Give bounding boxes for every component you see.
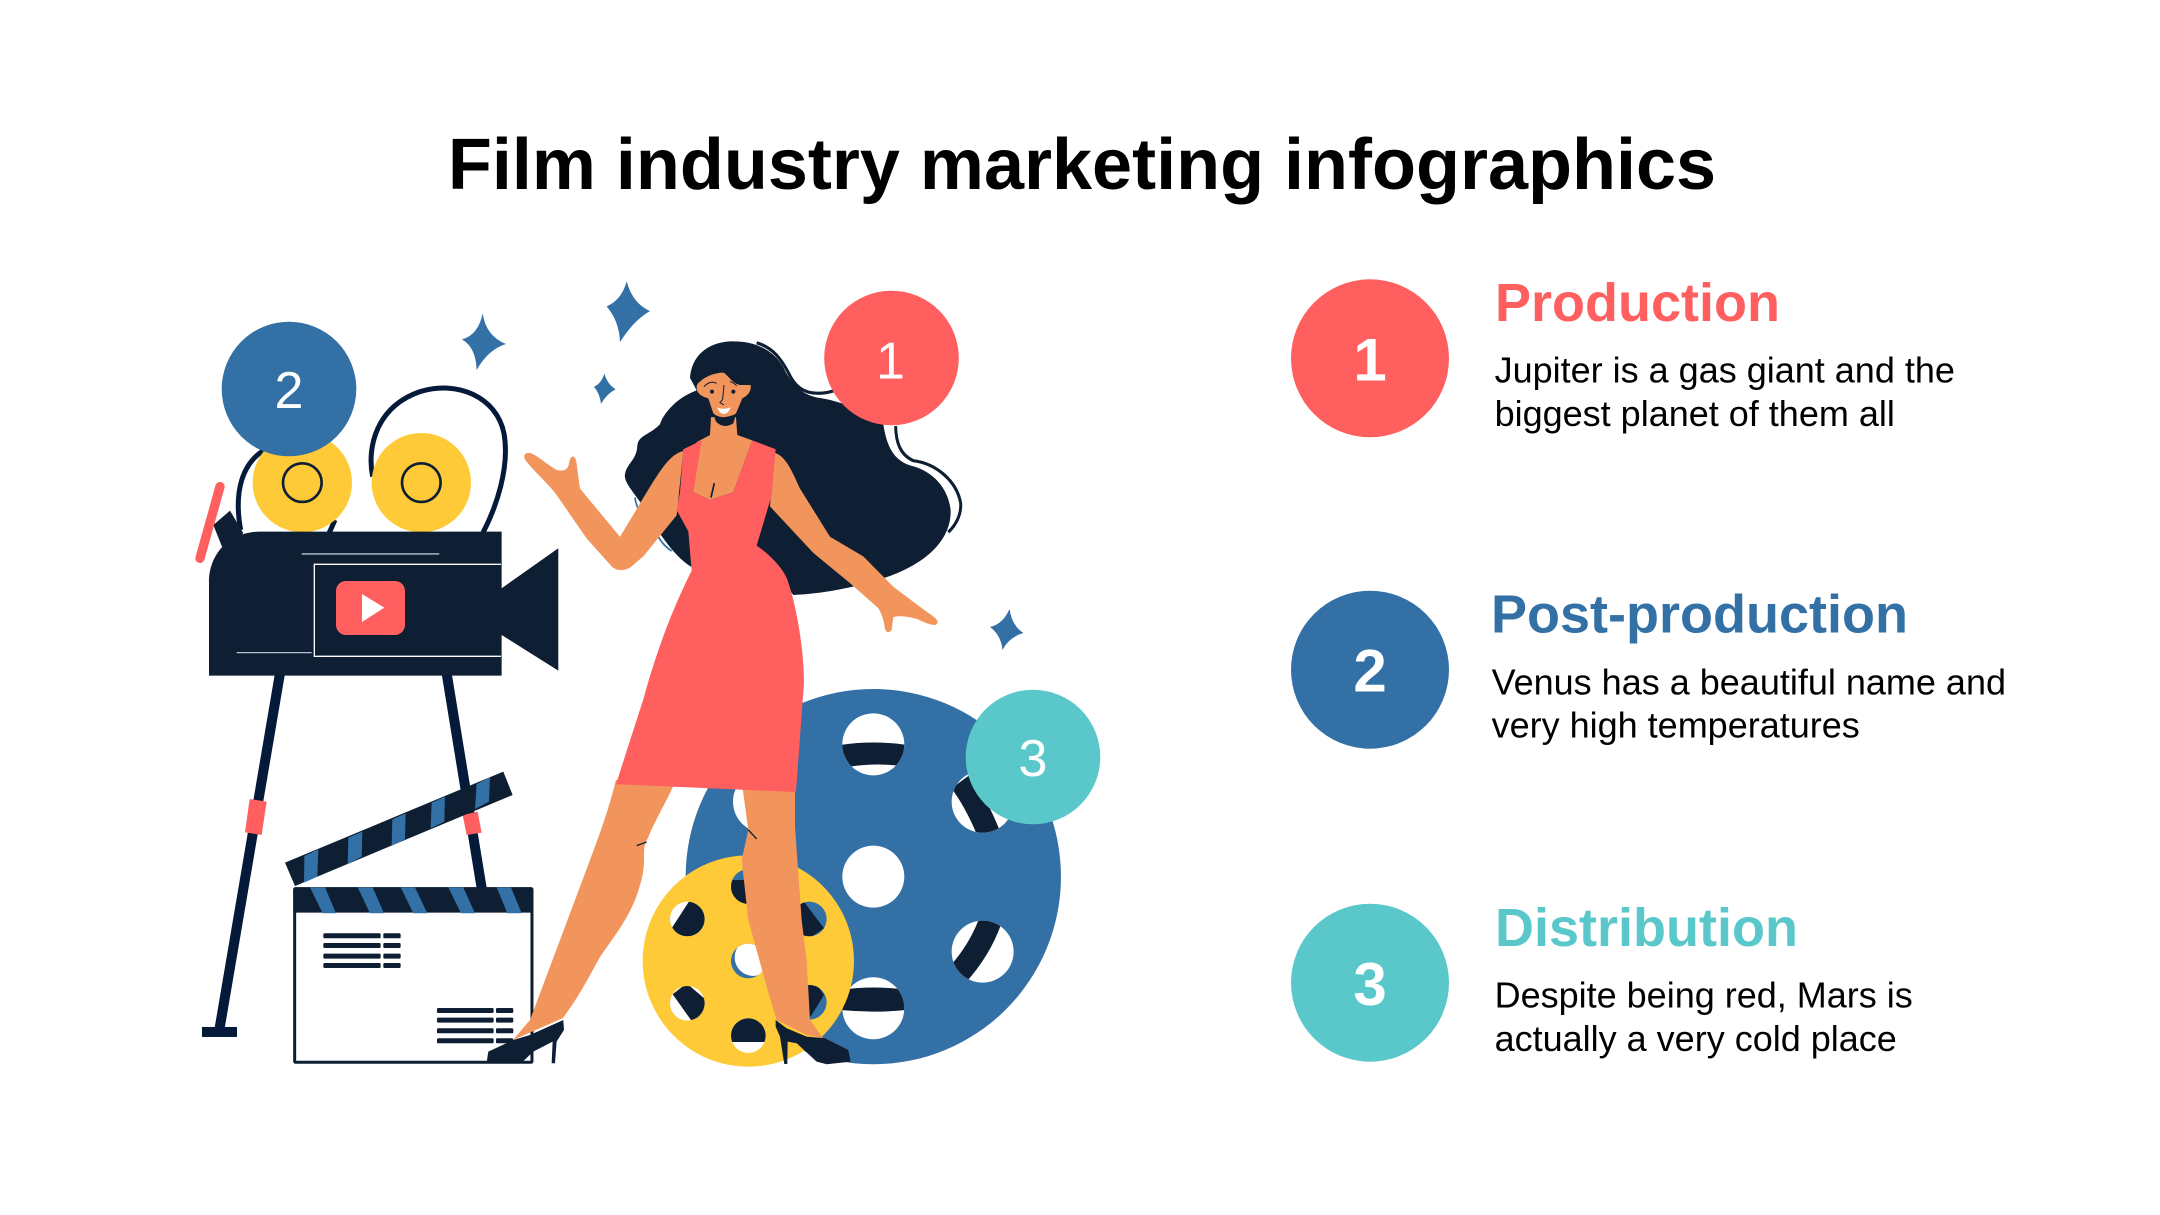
text block: Distribution description: actually a very cold place (1495, 1018, 1897, 1059)
camera body (200, 487, 558, 676)
badge 3 (966, 690, 1100, 824)
item 2: Post-production (1291, 585, 2006, 749)
film camera on tripod (200, 388, 558, 1037)
icon: play button (336, 581, 405, 635)
illustration: film crew scene (200, 281, 1100, 1067)
text block: Production description: Jupiter is a gas giant and the (1495, 350, 1955, 391)
camera film reels and cable (238, 388, 505, 533)
item 3: Distribution (1291, 898, 1913, 1062)
text block: Distribution description: Despite being red, Mars is (1495, 975, 1913, 1016)
clapperboard (285, 772, 533, 1062)
tripod (202, 673, 482, 1037)
yellow film reel (643, 855, 854, 1067)
number circle 3: 3 (1353, 951, 1387, 1018)
icon: stars (462, 281, 1024, 650)
badge 1: 1 (876, 332, 905, 390)
badge 1 (824, 291, 959, 425)
title: Film industry marketing infographics (448, 125, 1716, 205)
face (697, 373, 751, 426)
number circle 3 (1291, 904, 1449, 1062)
text block: Production description: biggest planet of them all (1495, 393, 1895, 434)
large blue film reel (686, 689, 1061, 1064)
hair (625, 341, 961, 595)
woman in red dress (487, 341, 961, 1064)
badge 2 (222, 322, 356, 456)
heading: Production: Production (1495, 273, 1780, 333)
number circle 1: 1 (1353, 327, 1387, 394)
legs and shoes (487, 780, 851, 1064)
arms, neck and dress (524, 417, 938, 792)
badge 2: 2 (275, 362, 303, 420)
number circle 2: 2 (1353, 638, 1387, 705)
item 1: Production (1291, 273, 1955, 437)
text block: Post-production description: very high temperatures (1492, 705, 1860, 746)
text block: Post-production description: Venus has a beautiful name and (1492, 661, 2006, 702)
heading: Distribution: Distribution (1495, 898, 1798, 958)
number circle 1 (1291, 279, 1449, 437)
film reels (643, 689, 1061, 1067)
heading: Post-production: Post-production (1491, 585, 1908, 645)
number circle 2 (1291, 591, 1449, 749)
badge 3: 3 (1019, 730, 1047, 788)
